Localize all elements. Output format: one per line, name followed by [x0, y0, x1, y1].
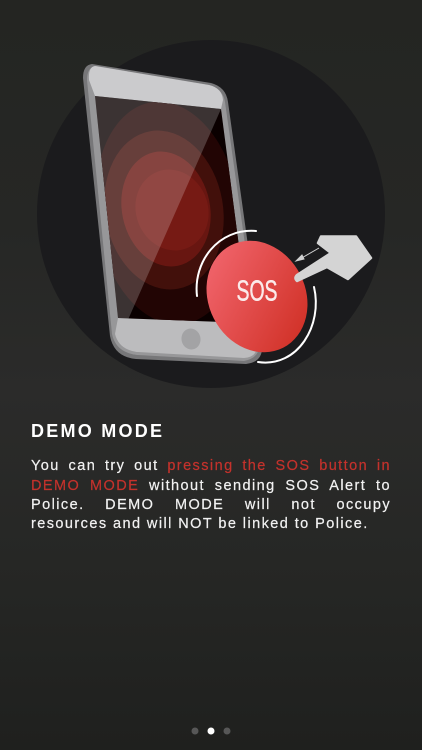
icon: arrow: [296, 248, 319, 261]
arcs around button: [197, 231, 316, 363]
icon: pointing hand: [296, 236, 371, 281]
phone: [81, 64, 262, 364]
phone top bezel: [89, 66, 223, 109]
phone outer edge: [83, 64, 262, 364]
SOS label: SOS: [236, 276, 278, 308]
phone bottom bezel: [115, 318, 257, 358]
phone screen: [95, 96, 238, 322]
phone side bevel: [87, 66, 259, 361]
body text: DEMO MODE without sending SOS Alert to: [31, 478, 391, 494]
SOS button: [188, 223, 326, 370]
body text: You can try out pressing the SOS button in: [31, 458, 391, 474]
pagination dots: [192, 728, 230, 734]
dark background circle: [37, 40, 385, 388]
body text: [31, 458, 391, 532]
body text: resources and will NOT be linked to Police.: [31, 516, 369, 532]
screen glare: [90, 90, 221, 322]
home button: [180, 327, 202, 351]
pulse rings: [101, 102, 238, 321]
illustration: phone with SOS button: [37, 40, 385, 388]
body text: Police. DEMO MODE will not occupy: [31, 497, 391, 513]
heading: DEMO MODE: [31, 421, 164, 441]
